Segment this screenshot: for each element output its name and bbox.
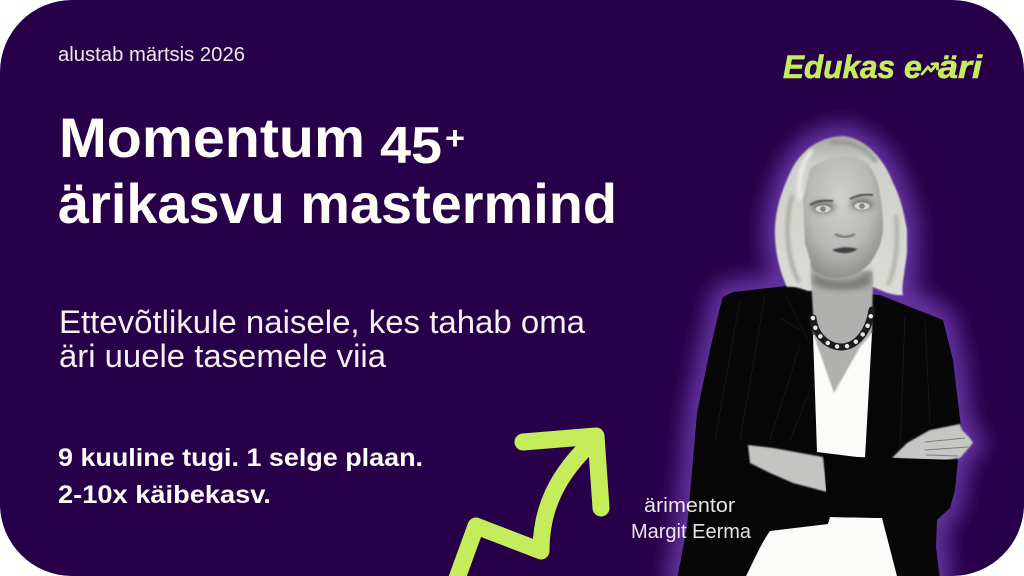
logo: Edukas e-äri: Edukas [783,49,895,85]
key benefits: 9 kuuline tugi. 1 selge plaan. [58,444,423,472]
forearm [748,445,827,492]
key benefits [58,448,422,503]
title [59,118,614,224]
hair [775,136,907,295]
subtitle: äri uuele tasemele viia [59,338,386,374]
finger lines [925,438,968,456]
logo: Edukas e-äri [783,54,983,78]
hand [892,424,973,461]
mentor caption: ärimentor [644,495,735,517]
jacket [677,286,961,576]
face [803,156,883,278]
badge: start date: alustab märtsis 2026 [58,44,245,66]
title: 45 [380,117,442,175]
mentor caption: Margit Eerma [631,521,752,543]
neck shadow [813,268,871,290]
subtitle [60,310,585,368]
jacket pinstripes [714,295,930,450]
logo: Edukas e-äri: äri [938,49,983,85]
subtitle: Ettevõtlikule naisele, kes tahab oma [59,304,585,340]
lower neck and white shirt [813,333,872,458]
sleeve [824,456,958,518]
hair strands [788,142,897,285]
lower shirt [744,517,898,576]
title: Momentum [59,106,365,169]
person glow [677,136,973,576]
facial features [810,194,874,253]
title: ärikasvu mastermind [58,172,617,235]
key benefits: 2-10x käibekasv. [58,481,271,509]
necklace [813,310,872,347]
logo: Edukas e-äri: e [904,49,922,85]
title: + [445,120,465,156]
neck and chest [810,262,873,393]
person: mentor portrait [677,136,973,576]
icon: rising green arrow [452,436,601,576]
mentor caption [631,495,752,543]
